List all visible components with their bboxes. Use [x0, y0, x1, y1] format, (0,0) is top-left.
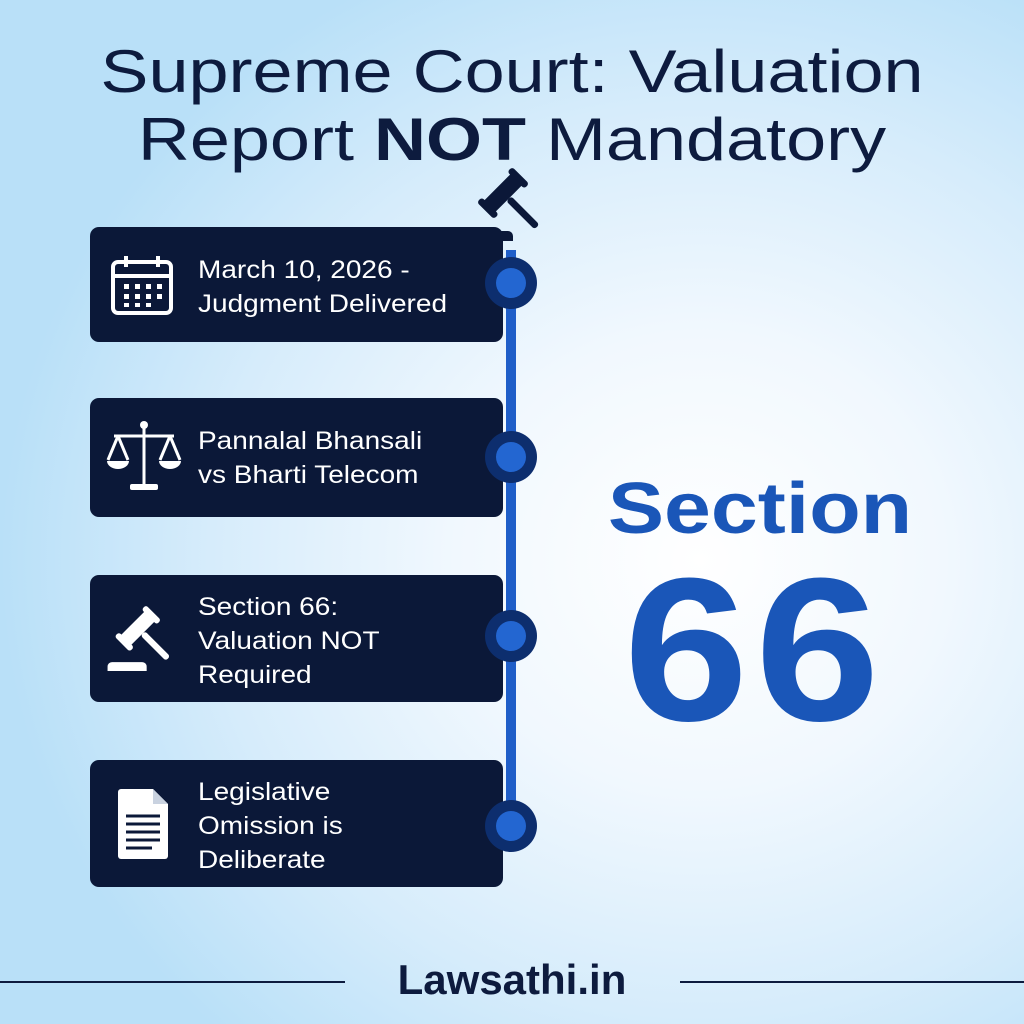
icon: calendar — [111, 256, 173, 315]
card 4: omission: Deliberate — [198, 846, 326, 874]
footer: Lawsathi.in — [398, 956, 626, 1003]
card 2: parties: Pannalal Bhansali — [198, 427, 422, 455]
icon: document — [118, 789, 168, 859]
card 3: section 66: Valuation NOT — [198, 627, 380, 655]
icon: top gavel — [478, 168, 538, 241]
timeline line — [506, 250, 516, 830]
title: Supreme Court: Valuation — [100, 38, 924, 105]
card 4: omission: Omission is — [198, 812, 343, 840]
card 1: date — [90, 227, 503, 342]
icon: gavel — [108, 606, 169, 671]
title — [100, 38, 924, 173]
card 1: date: Judgment Delivered — [198, 290, 447, 318]
title: Report NOT Mandatory — [138, 106, 886, 173]
card 1: date: March 10, 2026 - — [198, 256, 410, 284]
big heading: Section: Section — [608, 469, 912, 549]
timeline dots — [485, 257, 537, 309]
big number: 66: 66 — [624, 536, 886, 764]
icon: scales — [106, 421, 182, 490]
card 3: section 66: Required — [198, 661, 312, 689]
card 2: parties: vs Bharti Telecom — [198, 461, 418, 489]
card 4: omission — [90, 760, 503, 887]
card 2: parties — [90, 398, 503, 517]
card 3: section 66: Section 66: — [198, 593, 338, 621]
card 4: omission: Legislative — [198, 778, 330, 806]
card 3: section 66 — [90, 575, 503, 702]
